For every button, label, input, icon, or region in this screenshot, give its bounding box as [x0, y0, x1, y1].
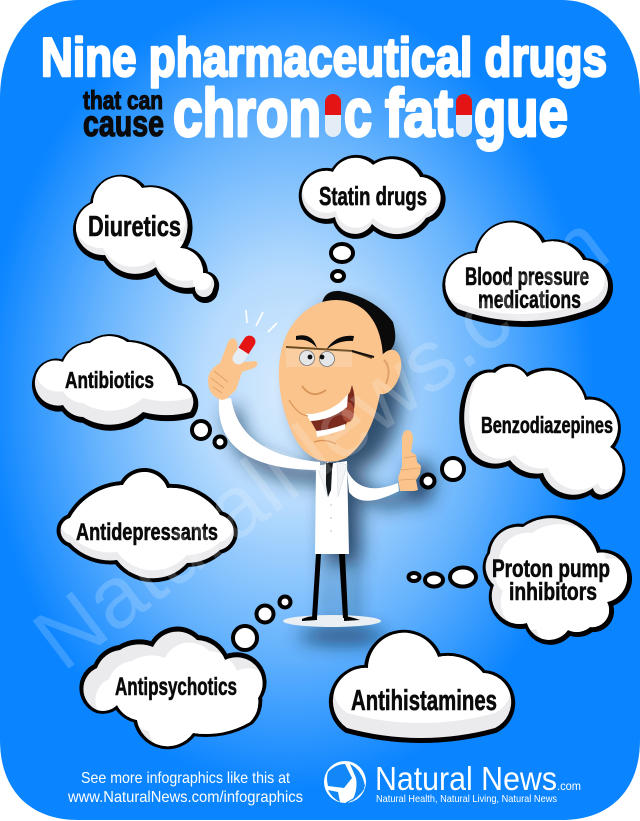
thought bubble: Antihistamines: [333, 618, 511, 739]
logo: [324, 760, 581, 805]
doctor illustration: [208, 291, 434, 644]
that can cause: [83, 85, 164, 144]
icon: held pill: [230, 333, 258, 367]
title: [41, 26, 607, 151]
eyes: [300, 350, 334, 366]
doctor shadow: [232, 304, 434, 644]
label: Antipsychotics: [115, 673, 237, 701]
small bubbles: [331, 244, 353, 281]
chronic fatigue: chron: [173, 75, 321, 151]
logo: .com: [557, 779, 581, 793]
brand name: Natural News: [375, 760, 557, 797]
raised arm: [219, 398, 320, 470]
thought bubble: Blood pressure medications: [442, 216, 609, 323]
icon: globe: [324, 761, 366, 803]
small bubbles: [408, 568, 476, 586]
thought bubble: Diuretics: [74, 170, 215, 299]
small bubbles: [192, 421, 226, 448]
footer link text: [67, 770, 303, 806]
mouth: [289, 385, 355, 444]
glasses: [286, 347, 374, 367]
thumbs up hand: [398, 430, 421, 491]
thought bubble: Antibiotics: [35, 322, 226, 448]
label: Diuretics: [88, 211, 181, 243]
icon: pill replacing i in chronic: [325, 94, 341, 137]
ear: [368, 346, 406, 398]
that can cause: that can: [83, 85, 163, 115]
thumbs up arm: [347, 470, 399, 501]
thought bubble: Blood pressure medications: medications: [478, 286, 581, 314]
thought bubble: Statin drugs: [302, 152, 442, 281]
thought bubble: Proton pump inhibitors: [408, 518, 636, 646]
eyebrows: [296, 335, 354, 350]
face: [279, 300, 383, 462]
chronic fatigue: [173, 75, 568, 151]
thought bubble: Proton pump inhibitors: inhibitors: [509, 578, 597, 606]
watermark: NaturalNews.com: [16, 195, 625, 688]
chronic fatigue: c: [344, 75, 372, 151]
footer link text: See more infographics like this at: [81, 770, 290, 787]
platform: [283, 615, 381, 627]
chronic fatigue: gue: [474, 75, 568, 151]
that can cause: cause: [83, 103, 164, 144]
chronic fatigue: fat: [385, 75, 453, 151]
legs: [302, 554, 360, 621]
footer link text: www.NaturalNews.com/infographics: [67, 789, 303, 806]
sparkle lines: [246, 310, 277, 332]
label: Statin drugs: [319, 181, 427, 211]
thought bubble: Antipsychotics: [83, 596, 290, 757]
hair back: [286, 291, 395, 372]
label: Antibiotics: [65, 367, 154, 393]
small bubbles: [233, 596, 290, 650]
thought bubble: Antidepressants: [61, 464, 234, 578]
lab coat: [315, 461, 349, 554]
label: Antidepressants: [76, 519, 218, 546]
thought bubble: Benzodiazepines: [422, 362, 627, 496]
small bubbles: [422, 458, 464, 488]
icon: pill replacing i in fatigue: [456, 94, 472, 137]
nose: [302, 386, 326, 394]
tagline: Natural Health, Natural Living, Natural News: [376, 793, 557, 805]
raised hand: [208, 338, 258, 400]
label: Antihistamines: [351, 685, 497, 717]
